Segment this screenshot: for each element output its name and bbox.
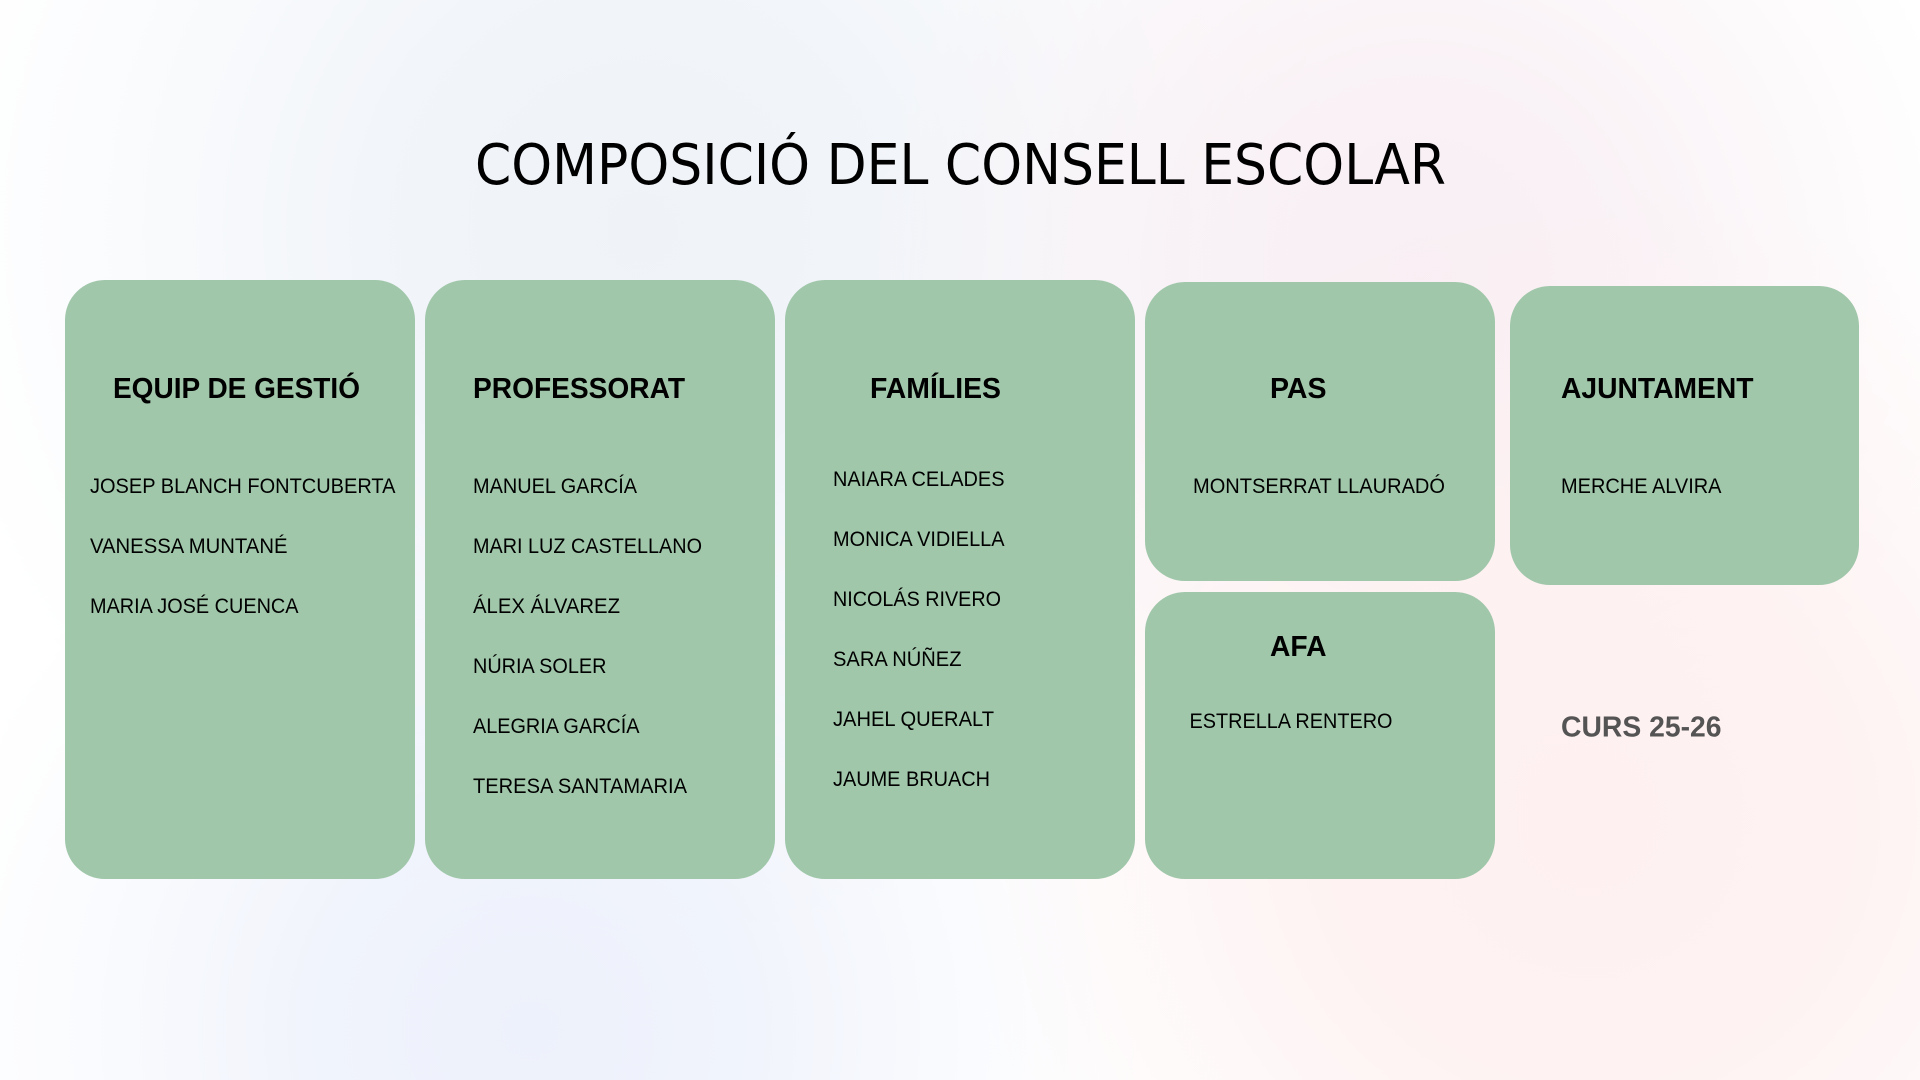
heading: famílies: FAMÍLIES <box>870 373 1001 405</box>
panel: afa <box>1145 592 1495 879</box>
heading: professorat: PROFESSORAT <box>473 373 686 405</box>
names: famílies: JAUME BRUACH <box>833 768 990 791</box>
panel: professorat <box>425 280 775 879</box>
heading: afa: AFA <box>1270 631 1326 663</box>
names: equip de gestió <box>90 475 396 618</box>
names: famílies: NAIARA CELADES <box>833 468 1004 491</box>
name: pas: MONTSERRAT LLAURADÓ <box>1193 475 1445 498</box>
heading: equip de gestió: EQUIP DE GESTIÓ <box>113 373 360 405</box>
names: equip de gestió: VANESSA MUNTANÉ <box>90 535 288 558</box>
names: professorat: NÚRIA SOLER <box>473 655 606 678</box>
names: famílies: NICOLÁS RIVERO <box>833 588 1001 611</box>
names: equip de gestió: MARIA JOSÉ CUENCA <box>90 595 298 618</box>
names: professorat: MARI LUZ CASTELLANO <box>473 535 702 558</box>
panel: famílies <box>785 280 1135 879</box>
title: COMPOSICIÓ DEL CONSELL ESCOLAR <box>475 133 1446 198</box>
panel: pas <box>1145 282 1495 581</box>
names: professorat: MANUEL GARCÍA <box>473 475 637 498</box>
names: famílies <box>833 468 1004 791</box>
heading: pas: PAS <box>1270 373 1326 405</box>
names: professorat: ÁLEX ÁLVAREZ <box>473 595 620 618</box>
panel: equip de gestió <box>65 280 415 879</box>
name: afa: ESTRELLA RENTERO <box>1190 710 1392 733</box>
names: famílies: MONICA VIDIELLA <box>833 528 1004 551</box>
heading: ajuntament: AJUNTAMENT <box>1561 373 1754 405</box>
names: famílies: JAHEL QUERALT <box>833 708 994 731</box>
names: professorat <box>473 475 702 798</box>
names: professorat: TERESA SANTAMARIA <box>473 775 687 798</box>
names: famílies: SARA NÚÑEZ <box>833 647 962 671</box>
label: school year: CURS 25-26 <box>1561 712 1722 744</box>
name: ajuntament: MERCHE ALVIRA <box>1561 475 1722 498</box>
names: professorat: ALEGRIA GARCÍA <box>473 715 640 738</box>
names: equip de gestió: JOSEP BLANCH FONTCUBERTA <box>90 475 396 498</box>
panel: ajuntament <box>1510 286 1859 585</box>
